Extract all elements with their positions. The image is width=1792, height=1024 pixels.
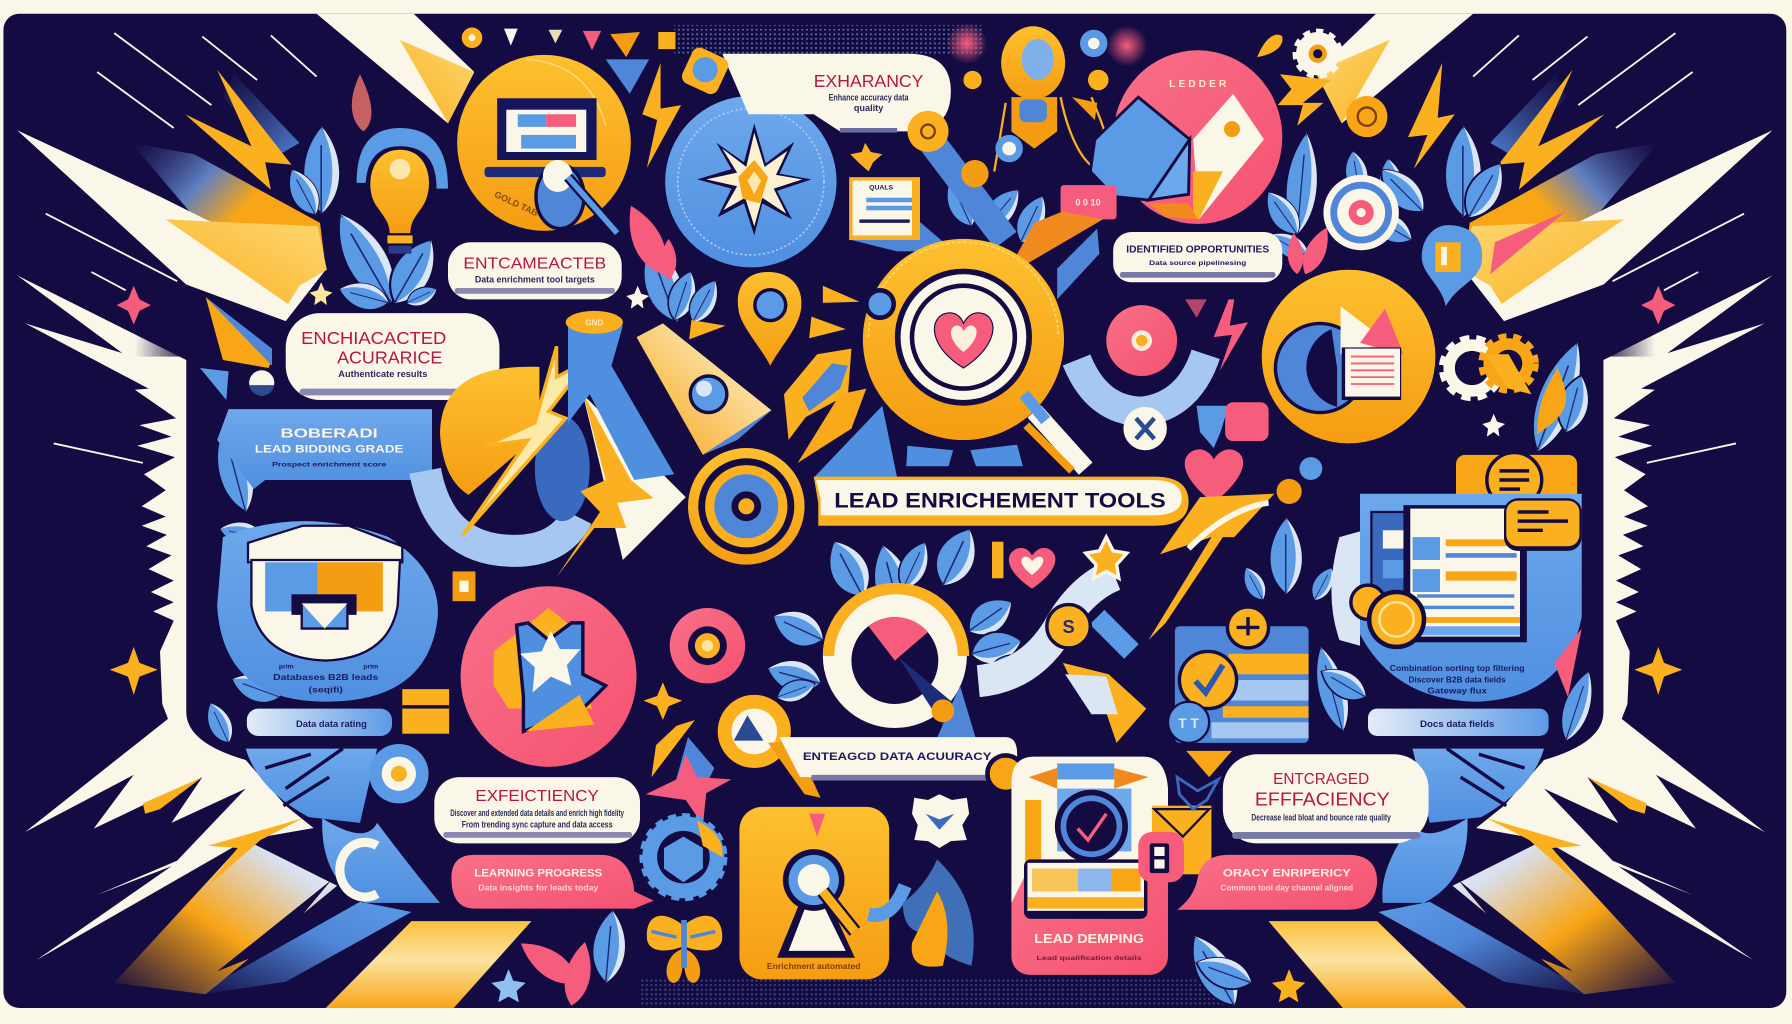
label: exharancy: Enhance accuracy data — [829, 93, 909, 103]
blue outline butterfly — [1177, 777, 1218, 809]
rocket tag — [1063, 663, 1146, 743]
pink tag — [1061, 185, 1117, 219]
main title banner — [814, 477, 1189, 526]
gauge circle — [823, 584, 977, 743]
blue diagonal strip — [1057, 229, 1099, 299]
small pink circle — [670, 608, 745, 683]
pink envelope circle bottom — [461, 586, 637, 767]
small yellow magnifier — [718, 695, 821, 798]
blue prism under magnifier — [814, 406, 1023, 478]
right sunburst — [1315, 14, 1773, 995]
blue shadow drop — [535, 416, 590, 521]
right blue document panel: Discover B2B data fields — [1409, 675, 1506, 684]
pink label left: Data insights for leads today — [478, 883, 599, 892]
small stars — [310, 282, 1505, 1002]
yellow half circle — [440, 367, 539, 495]
shield and heart — [1185, 402, 1322, 504]
right blue document panel — [1331, 494, 1582, 702]
emblem — [688, 448, 805, 565]
stacked data with check: T T — [1178, 716, 1199, 731]
label: efficiency: Discover and extended data details and enrich high fidelity — [450, 808, 625, 818]
label: identified opportunities: IDENTIFIED OPPORTUNITIES — [1126, 245, 1269, 256]
blue banner: LEAD BIDDING GRADE — [255, 444, 404, 456]
label: efficiency: EXFEICTIENCY — [475, 788, 599, 805]
ribbon with coin: S — [1062, 616, 1075, 637]
top lightning pair — [642, 63, 1455, 169]
yellow box — [402, 689, 449, 734]
yellow note bubble — [1504, 498, 1582, 551]
left sunburst — [17, 14, 474, 995]
pink leaves — [514, 200, 1336, 1008]
blue shield panel: Databases B2B leads — [273, 673, 379, 682]
pink card: LEAD DEMPING — [1034, 932, 1144, 946]
pink envelope circle — [1090, 50, 1282, 224]
stacked data with check — [1168, 607, 1309, 743]
pink tag: 0 0 10 — [1075, 198, 1101, 208]
pink label right: ORACY ENRIPERICY — [1223, 868, 1351, 880]
blue chevron badge — [912, 794, 969, 848]
target circle — [1323, 175, 1399, 250]
label: identified opportunities: Data source pipelinesing — [1149, 260, 1246, 267]
blue shield panel: (seqifi) — [309, 686, 343, 695]
big lightning 1 — [463, 346, 589, 535]
right blue document panel: Gateway flux — [1427, 687, 1488, 696]
label: engaged efficacy: EFFFACIENCY — [1255, 789, 1390, 810]
streak lines left — [46, 33, 317, 463]
blue banner — [217, 409, 432, 489]
yellow magnifier card — [739, 807, 889, 979]
label: exharancy: quality — [854, 103, 884, 113]
central dark field — [186, 114, 1603, 921]
label: entcameactee: ENTCAMEACTEB — [463, 256, 606, 273]
blue pill right — [1368, 709, 1549, 736]
blue shield panel — [217, 521, 438, 702]
orange small tag — [453, 571, 475, 601]
blue sash — [869, 886, 905, 915]
yellow flame leaf — [1537, 366, 1566, 434]
blue c leaf emblem — [340, 842, 377, 897]
blue badge gear — [642, 816, 725, 898]
blue pill left — [247, 709, 392, 736]
bottom right gold beam — [1269, 921, 1466, 1008]
label: enchanced accuracy — [286, 313, 499, 400]
top bulb — [946, 23, 1147, 171]
coin banner end — [987, 755, 1024, 792]
blue wing left — [246, 749, 440, 903]
label: engaged efficacy — [1223, 754, 1429, 843]
blue pillar — [566, 311, 674, 480]
blue shield panel: prim — [279, 664, 294, 671]
main title banner: LEAD ENRICHEMENT TOOLS — [834, 489, 1166, 512]
label: entcameactee: Data enrichment tool targets — [475, 274, 595, 284]
pink card — [1011, 757, 1168, 975]
blue orange plant — [903, 859, 974, 967]
label: engaged efficacy: ENTCRAGED — [1273, 771, 1369, 788]
pink card: Lead qualification details — [1037, 955, 1142, 962]
badge diamond — [679, 45, 731, 97]
label: identified opportunities — [1113, 232, 1282, 282]
label: entcameactee — [448, 242, 622, 299]
yellow group top right — [1456, 453, 1577, 507]
blue coin circle left — [369, 744, 429, 803]
label: enchanced accuracy: ENCHIACACTED — [301, 328, 446, 348]
label: enchanced accuracy: Authenticate results — [338, 369, 427, 379]
pink sparkle right — [1641, 286, 1675, 325]
label: efficiency — [434, 777, 640, 843]
ribbon with coin — [978, 575, 1131, 681]
circle x — [1123, 407, 1167, 450]
coin top right — [1346, 96, 1387, 137]
pink envelope circle: LEDDER — [1169, 79, 1227, 90]
arrows — [689, 286, 866, 463]
blue pillar: GND — [585, 319, 603, 328]
left drop — [352, 74, 371, 131]
yellow chart circle — [1262, 270, 1435, 443]
gears right — [1442, 336, 1536, 398]
pink sparkle left — [117, 286, 151, 325]
small icons left — [200, 297, 274, 400]
blue pill left: Data data rating — [296, 719, 367, 729]
bulb left — [357, 128, 448, 254]
leaf clusters — [200, 126, 1600, 1014]
rocket cream — [1065, 674, 1118, 714]
pink label right: Common tool day channel aligned — [1221, 883, 1353, 892]
bottom left gold beam — [326, 921, 531, 1008]
top left small coin and drop — [1257, 35, 1283, 57]
coins on panel — [1351, 585, 1424, 647]
label: engaged efficacy: Decrease lead bloat and bounce rate quality — [1251, 813, 1392, 823]
bubble with tag — [1422, 225, 1482, 306]
label: exharancy — [722, 54, 951, 133]
butterfly — [647, 916, 722, 983]
blue star circle — [665, 96, 837, 267]
label: exharancy: EXHARANCY — [814, 71, 924, 91]
blue pill right: Docs data fields — [1420, 719, 1494, 729]
gear top right — [1278, 32, 1339, 126]
blue wing right — [1382, 749, 1544, 903]
streak lines right — [1473, 33, 1744, 463]
dotted band bottom — [640, 977, 1234, 1005]
gold sparkle right — [1634, 647, 1682, 695]
pink flare right — [1490, 211, 1566, 274]
blue banner: BOBERADI — [281, 427, 378, 441]
magnifier — [863, 239, 1086, 471]
pink label left — [451, 855, 654, 909]
small doc — [849, 177, 954, 251]
dotted band top — [674, 25, 983, 55]
yellow pin — [738, 272, 801, 366]
gold sparkle left — [110, 647, 158, 695]
left lightning — [185, 70, 291, 190]
blue wand with coins — [850, 111, 1006, 240]
pink sun circle — [1106, 299, 1248, 376]
right blue document panel: Combination sorting top filtering — [1390, 664, 1525, 673]
big lightning 2 — [557, 393, 654, 577]
star and heart — [992, 537, 1127, 589]
pink label left: LEARNING PROGRESS — [474, 868, 603, 880]
pink label right — [1177, 855, 1377, 910]
gold triangle — [1186, 751, 1232, 777]
cream wedge — [583, 394, 686, 560]
right lightning — [1498, 70, 1605, 190]
yellow laptop circle: GOLD TAB — [493, 189, 540, 218]
data accuracy banner: ENTEAGCD DATA ACUURACY — [803, 751, 992, 763]
blue shield panel: prim — [363, 664, 378, 671]
ribbon white streak — [1189, 503, 1269, 549]
prism with bulb — [637, 323, 771, 455]
ribbon lightning — [1149, 494, 1274, 640]
blue banner: Prospect enrichment score — [272, 461, 387, 468]
label: enchanced accuracy: ACURARICE — [337, 347, 442, 367]
label: efficiency: From trending sync capture and data access — [462, 819, 613, 829]
blue swoosh centre right — [1077, 354, 1206, 411]
small doc: QUALS — [869, 185, 894, 192]
top icons row — [462, 27, 675, 94]
data accuracy banner — [779, 737, 1017, 781]
yellow magnifier card: Enrichment automated — [767, 962, 861, 971]
pink lock and envelope — [1138, 806, 1211, 882]
blue diagonal panel — [1000, 211, 1103, 286]
yellow laptop circle — [457, 55, 631, 233]
blue swoosh left — [425, 471, 577, 551]
star burst mid — [643, 682, 731, 825]
